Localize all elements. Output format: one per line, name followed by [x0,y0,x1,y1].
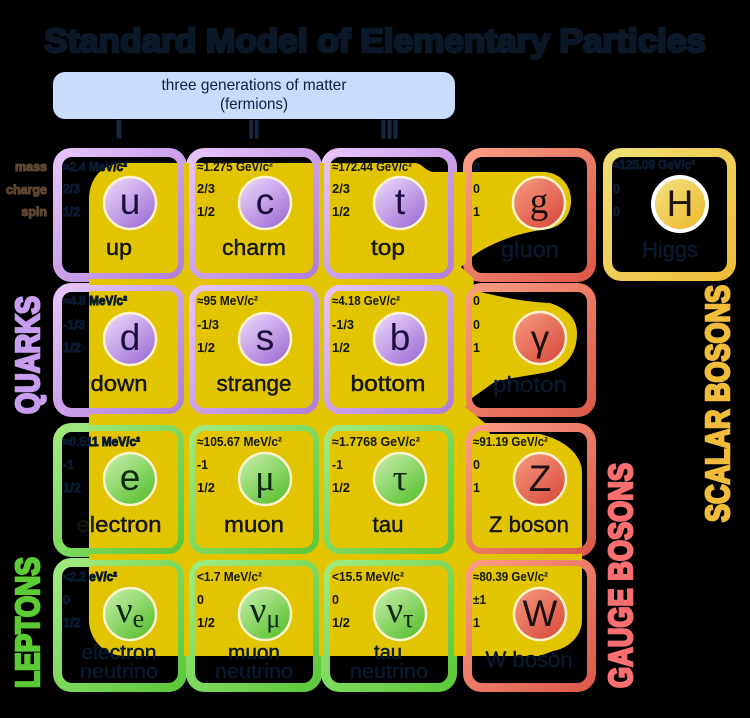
cell: tau: τ [393,458,408,499]
row labels: mass, charge, spin: mass [15,160,47,174]
cell: tau: ≈1.7768 GeV/c² [332,435,420,449]
cell: muon: ≈105.67 MeV/c² [197,435,282,449]
cell: muon: 1/2 [197,481,215,495]
cell: electron: ≈0.511 MeV/c² [63,435,140,449]
cell: bottom quark [327,288,451,411]
generation numerals: III [380,116,398,144]
cell: gluon: 1 [473,205,480,219]
cell: down quark: down [90,371,148,396]
generation numerals: II [248,116,260,144]
cell: tau: 1/2 [332,481,350,495]
cell: tau neutrino: tau [374,642,402,664]
cell: electron neutrino: 0 [63,593,70,607]
cell: up quark: 1/2 [63,205,80,219]
label: GAUGE BOSONS: GAUGE BOSONS [602,463,639,688]
cell: Z boson: 1 [473,481,480,495]
cell: Higgs: ≈125.09 GeV/c² [613,158,695,172]
cell: charm quark: ≈1.275 GeV/c² [197,160,273,174]
cell: W boson: W boson [486,647,572,672]
generation numerals [116,116,398,144]
cell: strange quark: s [256,317,274,358]
cell: bottom quark: bottom [350,371,426,396]
cell: tau neutrino: neutrino [350,661,428,683]
cell: charm quark: 2/3 [197,182,215,196]
label: QUARKS: QUARKS [9,296,46,414]
cell: electron neutrino [59,563,181,686]
cell: up quark: ≈2.4 MeV/c² [63,160,127,174]
cell: Higgs: Higgs [642,237,698,262]
cell: electron neutrino: electron [82,642,156,664]
label: SCALAR BOSONS: SCALAR BOSONS [699,285,736,522]
cell border underlay [58,152,732,688]
cell: gluon: 0 [473,160,480,174]
cell: Z boson [469,428,590,551]
cell: muon neutrino: 1/2 [197,616,215,630]
cell: down quark [59,288,181,411]
cell: gluon: 0 [473,182,480,196]
cell: bottom quark: ≈4.18 GeV/c² [332,294,400,308]
panel: three generations of matter header [53,72,455,119]
cell: W boson: 1 [473,616,480,630]
generation numerals: I [116,116,122,144]
cell: down quark: -1/3 [63,318,85,332]
cell: down quark: 1/2 [63,341,81,355]
cell: electron neutrino: neutrino [80,661,158,683]
cell: up quark: 2/3 [63,182,80,196]
cell: down quark: d [120,317,140,358]
cell: electron neutrino: <2.2 eV/c² [63,570,117,584]
cell: tau [327,428,451,551]
yellow background blob [89,163,582,656]
cell: muon: muon [224,512,284,537]
cell: Z boson: Z [529,458,551,499]
cell: electron: 1/2 [63,481,81,495]
cell: strange quark: 1/2 [197,341,215,355]
cell: tau neutrino: ν [386,590,403,631]
title: Standard Model of Elementary Particles [44,22,706,59]
row labels: mass, charge, spin [6,160,47,219]
cell: bottom quark: -1/3 [332,318,354,332]
cell: tau neutrino: 0 [332,593,339,607]
cell: strange quark: ≈95 MeV/c² [197,294,258,308]
cell: strange quark [192,288,316,411]
cell: top quark: ≈172.44 GeV/c² [332,160,412,174]
cell: Z boson: Z boson [489,512,569,537]
cell: Higgs: 0 [613,182,620,196]
cell: tau: -1 [332,458,343,472]
cell: strange quark: -1/3 [197,318,219,332]
cell: top quark [327,154,451,276]
cell: bottom quark: 1/2 [332,341,350,355]
cell: down quark: ≈4.8 MeV/c² [63,294,127,308]
cell: electron: electron [76,512,162,537]
cell: photon: γ [531,318,550,359]
cell: electron: -1 [63,458,74,472]
cell: muon: -1 [197,458,208,472]
cell: photon: 0 [473,318,480,332]
cell: W boson: W [523,593,558,634]
cell: tau neutrino: τ [403,604,414,633]
cell: top quark: 2/3 [332,182,350,196]
cell: charm quark: charm [222,235,286,260]
cell: muon: μ [255,458,275,499]
cell: charm quark [192,154,316,276]
cell: muon neutrino: 0 [197,593,204,607]
panel: three generations of matter header: three generations of matter [162,77,347,94]
cell: electron neutrino: 1/2 [63,616,81,630]
cell: electron [59,428,181,551]
cell: muon neutrino: ν [250,590,266,631]
cell: tau neutrino: 1/2 [332,616,350,630]
cell: tau neutrino [327,563,451,686]
cell: tau neutrino: <15.5 MeV/c² [332,570,404,584]
cell: electron neutrino: ν [116,590,133,631]
cell: muon neutrino: neutrino [215,661,293,683]
cell: photon: 1 [473,341,480,355]
row labels: mass, charge, spin: charge [6,183,47,197]
cell: bottom quark: b [390,317,410,358]
cell: muon neutrino: <1.7 MeV/c² [197,570,262,584]
cell: photon [469,288,590,411]
cell: Z boson: ≈91.19 GeV/c² [473,435,548,449]
cell: gluon: g [530,181,548,222]
cell: photon: 0 [473,294,480,308]
cell: muon neutrino: μ [266,604,280,633]
cell: muon neutrino [192,563,316,686]
cell: Higgs: 0 [613,205,620,219]
label: LEPTONS: LEPTONS [9,557,46,688]
cell: gluon [469,154,590,276]
cell: photon: photon [493,372,567,397]
cell: electron: e [120,457,140,498]
cell: gluon: gluon [501,237,559,262]
cell: charm quark: 1/2 [197,205,215,219]
cell: W boson [469,563,590,686]
cell: tau: tau [372,512,404,537]
row labels: mass, charge, spin: spin [21,205,47,219]
panel: three generations of matter header: (fermions) [220,96,288,113]
cell: top quark: 1/2 [332,205,350,219]
cell: Higgs: H [667,183,693,224]
cell: charm quark: c [256,181,274,222]
cell: up quark: up [106,235,132,260]
cell: W boson: ±1 [473,593,486,607]
cell: muon neutrino: muon [228,642,280,664]
cell: Z boson: 0 [473,458,480,472]
cell: strange quark: strange [216,371,292,396]
cell: W boson: ≈80.39 GeV/c² [473,570,548,584]
cell: top quark: t [395,181,406,222]
cell: up quark [59,154,181,276]
cell: Higgs [609,154,730,275]
cell: up quark: u [120,181,140,222]
cell: muon [192,428,316,551]
cell: electron neutrino: e [133,604,144,633]
cell: top quark: top [371,235,405,260]
